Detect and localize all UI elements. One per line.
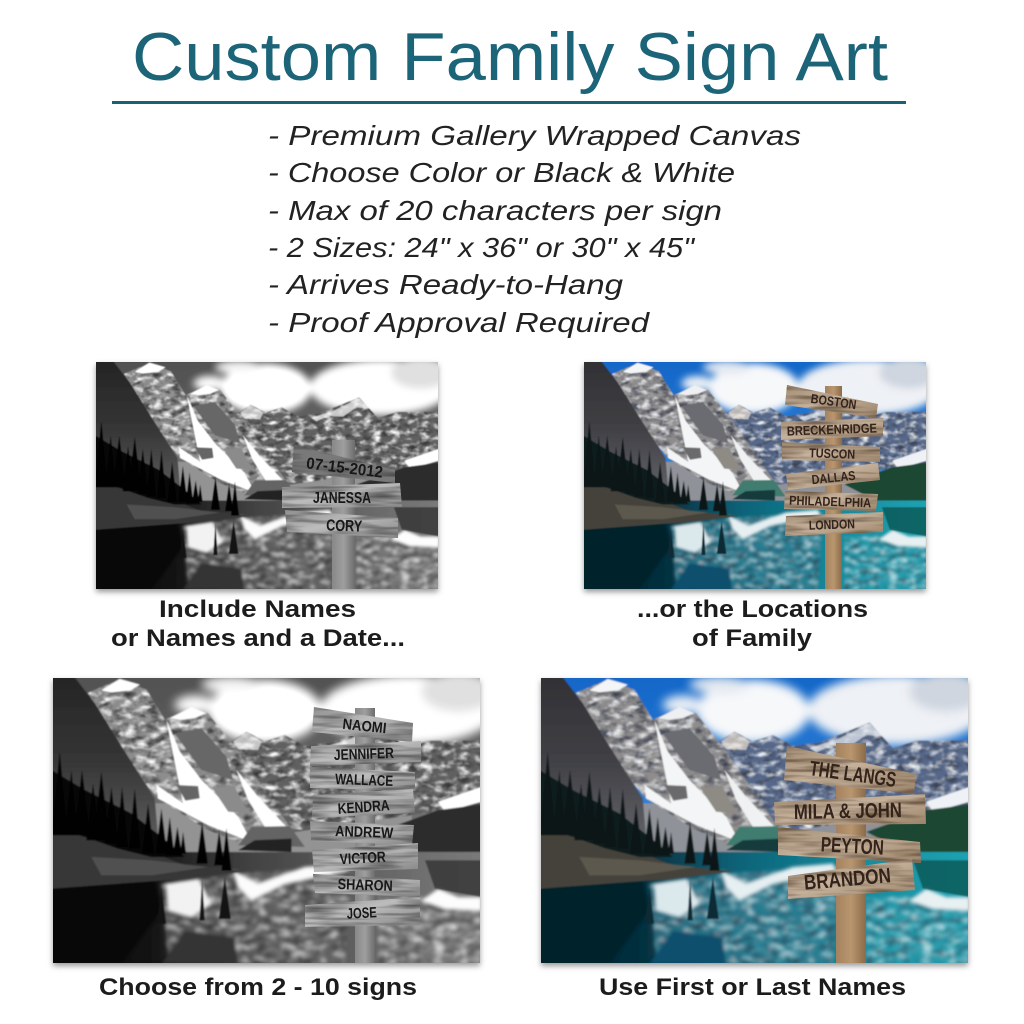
- panel: black and white canvas with eight signs: JOSE: [346, 904, 377, 923]
- caption: names and date: Include Names: [159, 596, 356, 623]
- panel: black and white canvas with eight signs: VICTOR: [339, 849, 386, 868]
- caption: locations: ...or the Locations: [637, 596, 868, 623]
- caption: locations: [637, 596, 868, 652]
- panel: black and white canvas with eight signs: KENDRA: [337, 797, 390, 818]
- feature list: - Max of 20 characters per sign: [268, 195, 722, 226]
- panel: black and white canvas with eight signs: NAOMI: [342, 716, 387, 737]
- panel: color canvas with four signs: THE LANGS: [808, 757, 898, 792]
- panel: black and white canvas with eight signs: [51, 671, 497, 966]
- feature list: [268, 120, 801, 338]
- panel: color canvas with family locations: [583, 357, 939, 592]
- feature list: - Proof Approval Required: [268, 307, 651, 338]
- panel: color canvas with family locations: BOSTON: [810, 391, 857, 412]
- caption: sign count: Choose from 2 - 10 signs: [99, 974, 417, 1001]
- feature list: - Arrives Ready-to-Hang: [268, 269, 623, 300]
- panel: black and white canvas with names and date: 07-15-2012: [305, 455, 384, 482]
- caption: first or last names: Use First or Last Names: [599, 974, 906, 1001]
- panel: black and white canvas with names and date: [95, 357, 451, 592]
- panel: color canvas with family locations: DALLAS: [811, 468, 856, 487]
- feature list: - Premium Gallery Wrapped Canvas: [268, 120, 801, 151]
- caption: locations: of Family: [692, 625, 813, 652]
- feature list: - Choose Color or Black & White: [268, 157, 735, 188]
- panel: color canvas with family locations: TUSCON: [809, 445, 855, 462]
- panel: color canvas with family locations: LONDON: [809, 516, 855, 533]
- panel: black and white canvas with names and date: CORY: [326, 517, 363, 536]
- panel: black and white canvas with eight signs: WALLACE: [335, 771, 393, 790]
- panel: color canvas with family locations: BRECKENRIDGE: [787, 420, 877, 439]
- panel: color canvas with four signs: BRANDON: [803, 864, 892, 895]
- caption: names and date: or Names and a Date...: [111, 625, 405, 652]
- panel: black and white canvas with names and date: JANESSA: [313, 490, 371, 507]
- panel: color canvas with four signs: PEYTON: [820, 833, 884, 860]
- feature list: - 2 Sizes: 24" x 36" or 30" x 45": [268, 232, 695, 263]
- panel: color canvas with family locations: PHILADELPHIA: [789, 493, 872, 510]
- title: Custom Family Sign Art: [132, 19, 888, 95]
- panel: color canvas with four signs: MILA & JOHN: [794, 799, 902, 824]
- caption: names and date: [111, 596, 405, 652]
- panel: color canvas with four signs: [539, 671, 985, 966]
- panel: black and white canvas with eight signs: SHARON: [337, 876, 393, 895]
- panel: black and white canvas with eight signs: JENNIFER: [334, 745, 394, 764]
- panel: black and white canvas with eight signs: ANDREW: [335, 823, 394, 842]
